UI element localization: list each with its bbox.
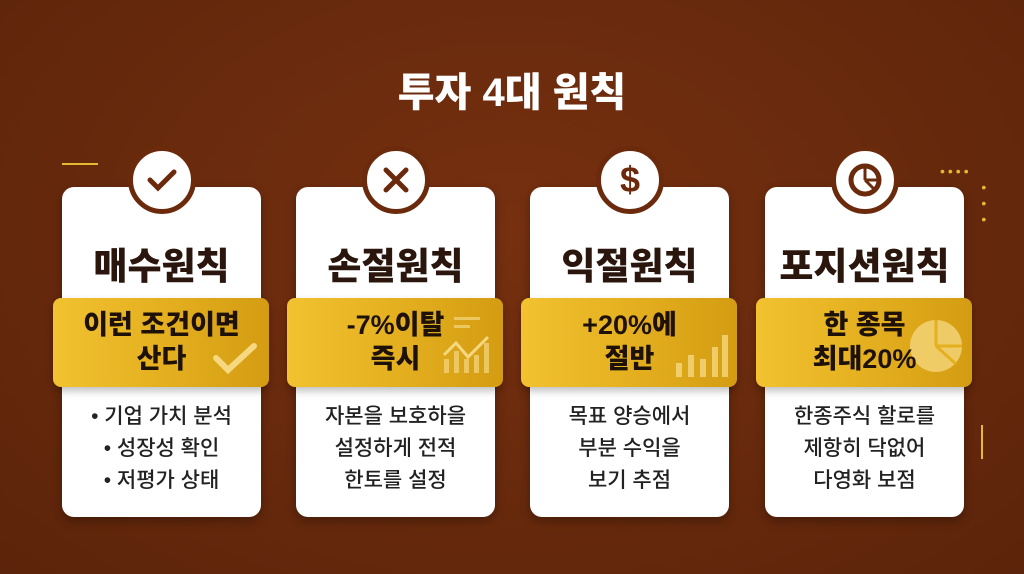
text: • 기업 가치 분석 [91,405,232,428]
panel: 익절원칙 [518,151,740,524]
text: 목표 양승에서 [569,405,690,428]
text: 설정하게 전적 [335,437,456,460]
text: 이런 조건이면 [83,310,240,340]
text: 매수원칙 [93,246,230,287]
text: 산다 [137,344,186,374]
decoration dots: •••• [940,163,972,179]
text: 제항히 닥없어 [804,437,925,460]
text: 한 종목 [823,310,906,340]
icon: dollar: $ [620,159,640,200]
text: 한종주식 할로를 [794,405,935,428]
text: 한토를 설정 [344,469,447,492]
text: • 성장성 확인 [104,437,219,460]
text: • [981,195,989,211]
decoration lines [62,163,98,165]
text: • [981,179,989,195]
text: +20%에 [582,310,677,340]
text: 보기 추점 [588,469,671,492]
text: 포지션원칙 [779,246,950,287]
text: • [981,211,989,227]
decoration dots [940,163,989,227]
text: 절반 [605,344,654,374]
panel: 매수원칙 [51,151,272,524]
text: 다영화 보점 [813,469,916,492]
icon: pie chart [831,146,899,214]
panel: 손절원칙 [285,151,506,524]
text: 최대20% [813,344,916,374]
text: 부분 수익을 [578,437,681,460]
icon: dollar [596,146,664,214]
text: 자본을 보호하을 [325,405,466,428]
text: 손절원칙 [327,246,464,287]
icon: x [362,146,430,214]
icon: check [128,146,196,214]
panel: 포지션원칙 [754,151,974,524]
title: 투자 4대 원칙 [398,71,626,115]
text: -7%이탈 [347,310,444,340]
text: • 저평가 상태 [104,469,219,492]
text: 익절원칙 [561,246,698,287]
text: 즉시 [371,344,420,374]
